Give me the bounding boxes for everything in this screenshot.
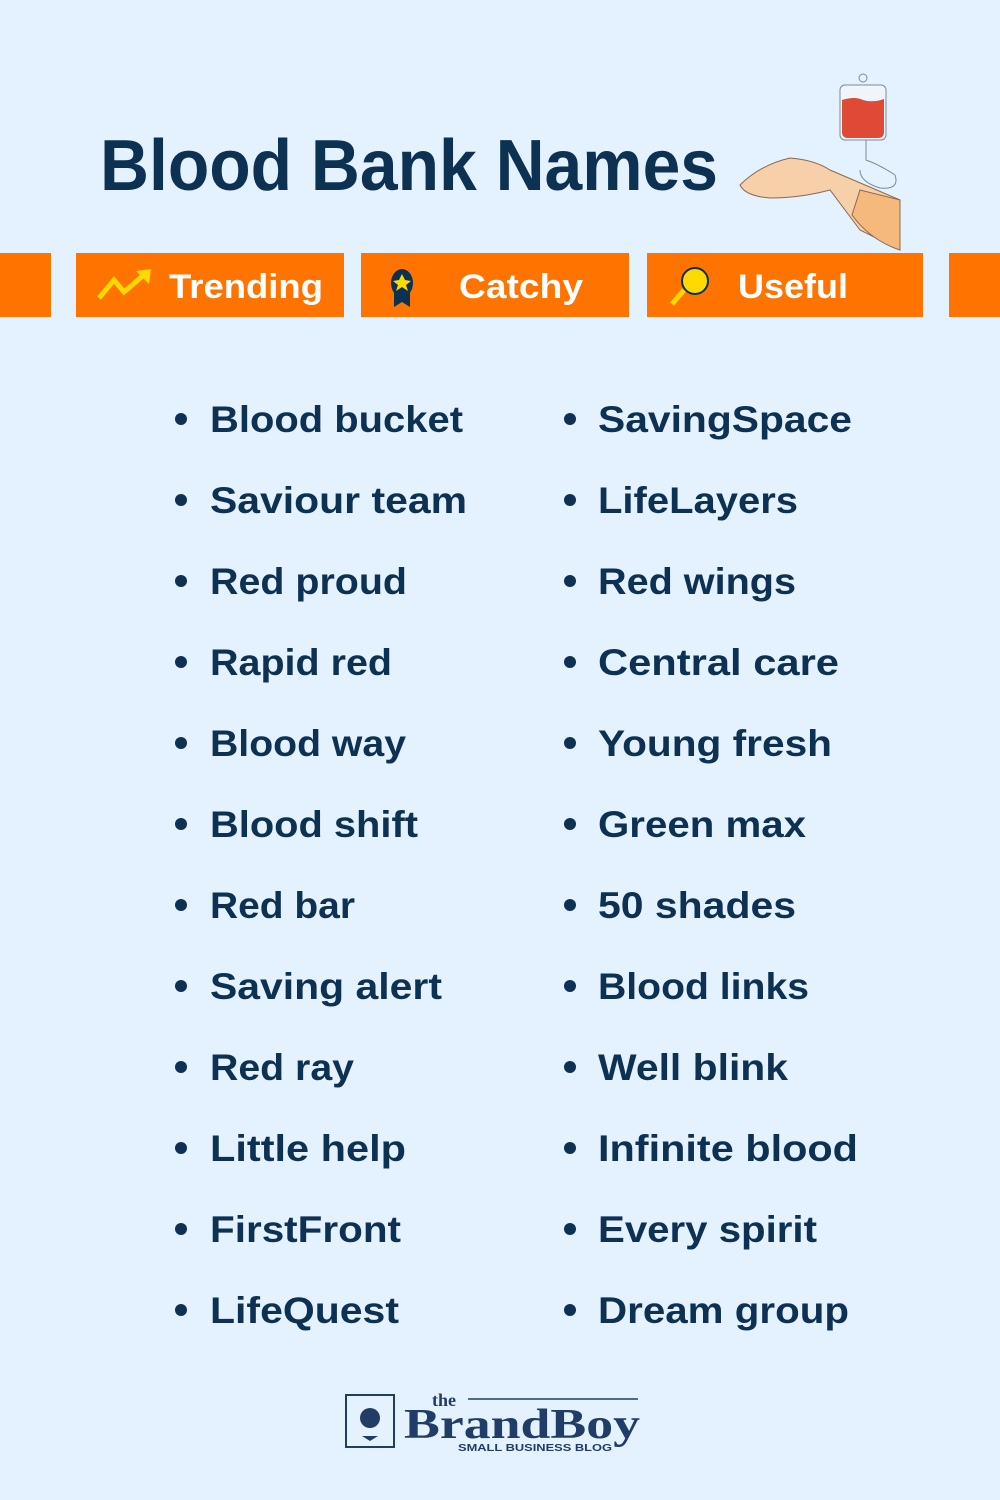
tab bar	[0, 253, 1000, 317]
list: left column: Saviour team	[210, 480, 467, 521]
list: right column: 50 shades	[598, 885, 796, 926]
logo: theBrandBoy	[346, 1390, 640, 1454]
tab: Catchy: Catchy	[459, 268, 583, 306]
tab: Useful	[647, 253, 923, 317]
list: left column: Red proud	[210, 561, 407, 602]
list: right column: LifeLayers	[598, 480, 798, 521]
list: right column: Blood links	[598, 966, 809, 1007]
list: right column: Infinite blood	[598, 1128, 858, 1169]
logo: theBrandBoy: SMALL BUSINESS BLOG	[458, 1443, 612, 1454]
list: left column: LifeQuest	[210, 1290, 399, 1331]
list: right column: SavingSpace	[598, 399, 852, 440]
list: right column: Red wings	[598, 561, 796, 602]
tab: Useful: Useful	[738, 268, 848, 306]
logo: theBrandBoy: BrandBoy	[404, 1402, 640, 1448]
list: left column: Blood way	[210, 723, 406, 764]
list: left column: Blood shift	[210, 804, 418, 845]
title: Blood Bank Names	[100, 126, 718, 206]
list: left column: FirstFront	[210, 1209, 401, 1250]
list: right column: Well blink	[598, 1047, 788, 1088]
list: left column	[175, 399, 467, 1331]
list: right column: Young fresh	[598, 723, 832, 764]
list: right column: Green max	[598, 804, 806, 845]
list: left column: Blood bucket	[210, 399, 463, 440]
list: right column: Every spirit	[598, 1209, 817, 1250]
tab: Trending	[76, 253, 344, 317]
tab: Trending: Trending	[169, 268, 323, 306]
tab: Catchy	[361, 253, 629, 317]
list: left column: Saving alert	[210, 966, 442, 1007]
list: left column: Red ray	[210, 1047, 354, 1088]
illustration: blood bag and arm	[740, 74, 900, 250]
list: left column: Little help	[210, 1128, 406, 1169]
list: right column: Central care	[598, 642, 839, 683]
list: left column: Rapid red	[210, 642, 392, 683]
logo: theBrandBoy: the	[432, 1390, 456, 1410]
list: left column: Red bar	[210, 885, 355, 926]
list: right column	[564, 399, 858, 1331]
list: right column: Dream group	[598, 1290, 849, 1331]
